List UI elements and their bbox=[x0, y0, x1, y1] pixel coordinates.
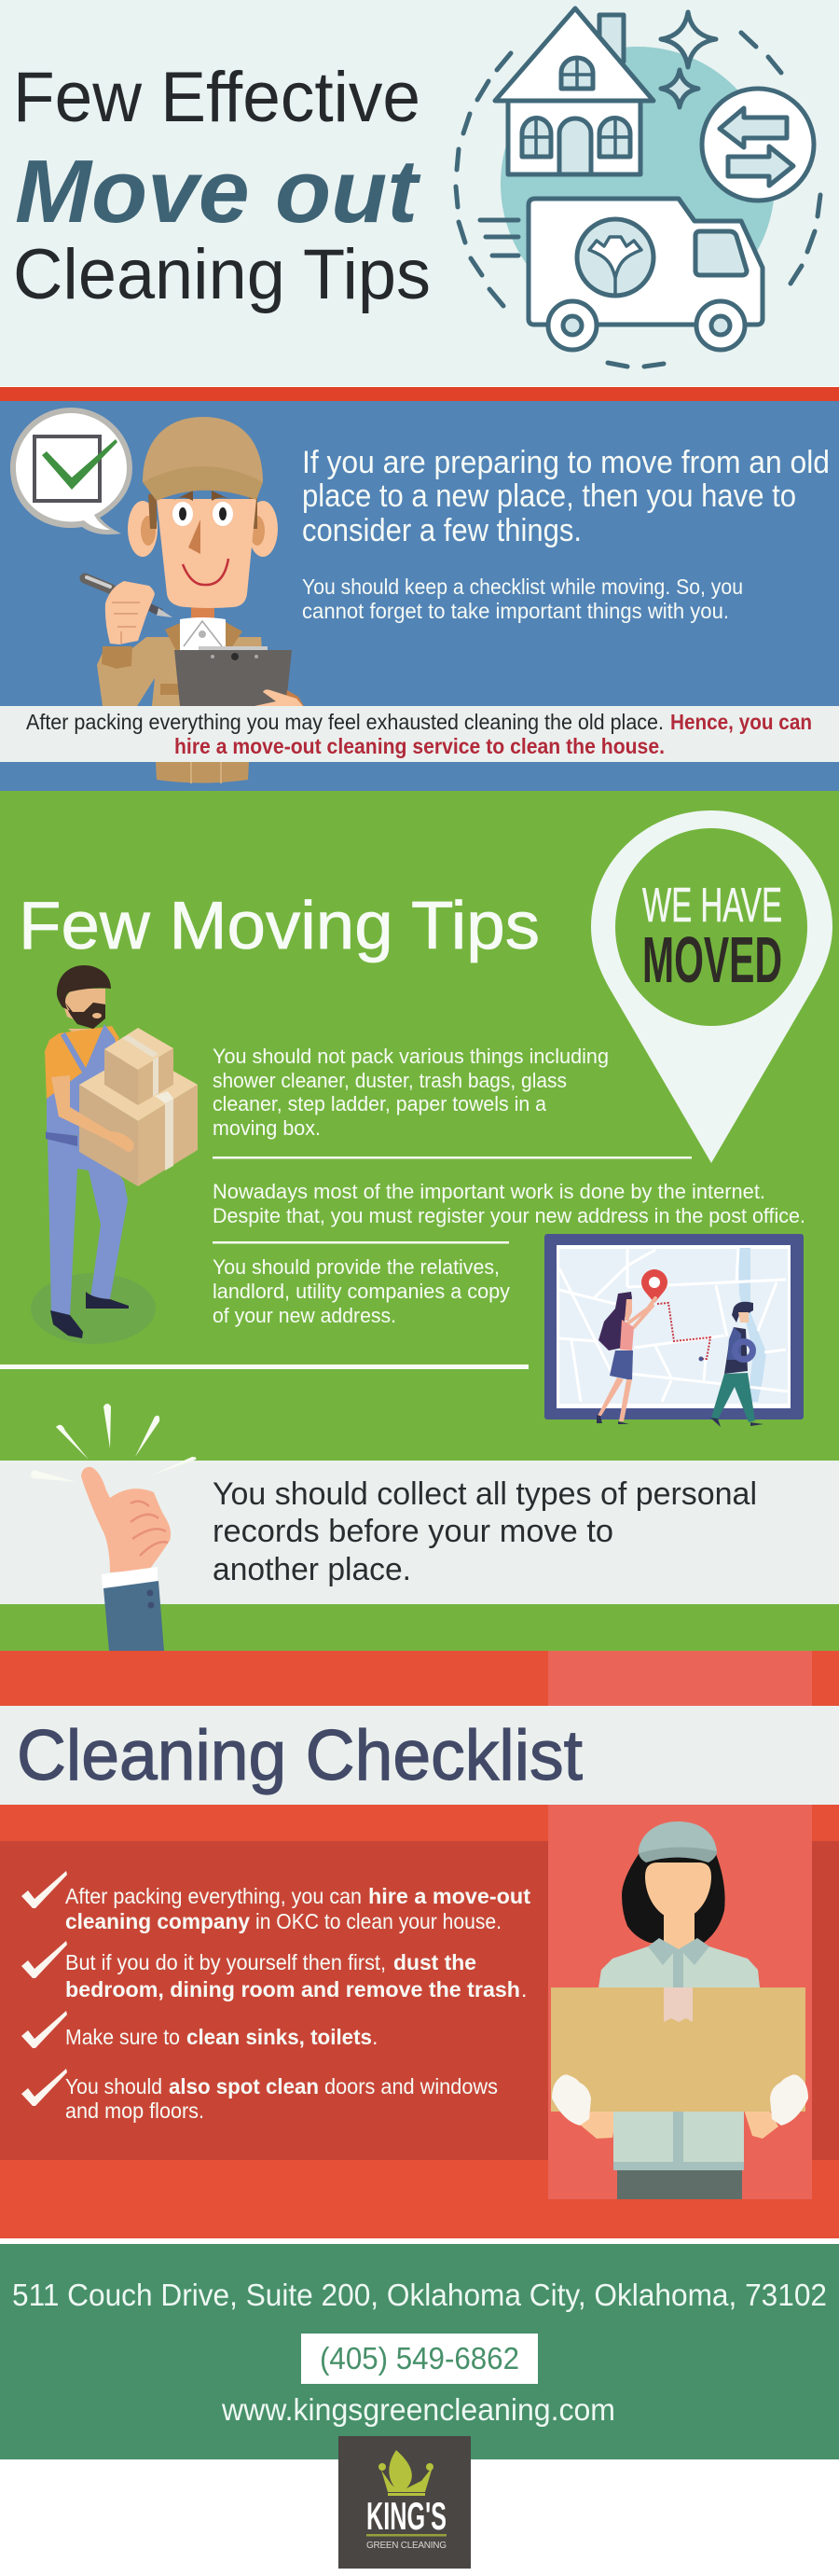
icon: we have moved map pin bbox=[591, 810, 832, 1163]
text block: register new address: Despite that, you must register your new address in the post office. bbox=[213, 1204, 805, 1227]
title: Few Effective bbox=[13, 58, 420, 137]
item 2: bedroom, dining room and remove the trash bbox=[65, 1977, 520, 2001]
item 4: doors and windows bbox=[324, 2074, 498, 2098]
illustration: woman holding a box bbox=[551, 1821, 808, 2199]
text block: what not to pack: You should not pack various things including bbox=[213, 1045, 609, 1068]
text block: intro heading: consider a few things. bbox=[302, 513, 582, 548]
red divider band bbox=[0, 387, 839, 401]
text block: provide a copy of address: landlord, utility companies a copy bbox=[213, 1280, 510, 1303]
panel: few moving tips bbox=[0, 791, 839, 1651]
item 1 bbox=[21, 1871, 530, 1933]
text block: checklist note bbox=[302, 575, 743, 623]
text block: what not to pack: shower cleaner, duster, trash bags, glass bbox=[213, 1069, 567, 1092]
address: 511 Couch Drive, Suite 200, Oklahoma City, Oklahoma, 73102 bbox=[12, 2278, 827, 2312]
panel: cleaning checklist bbox=[0, 1651, 839, 2238]
item 3: Make sure to bbox=[65, 2025, 180, 2049]
item 1: cleaning company bbox=[65, 1909, 250, 1933]
item 3 bbox=[21, 2011, 378, 2049]
logo: King's Green Cleaning bbox=[338, 2436, 471, 2569]
logo: King's Green Cleaning: KING'S bbox=[366, 2494, 447, 2538]
website: www.kingsgreencleaning.com bbox=[221, 2392, 615, 2427]
phone number bbox=[301, 2334, 538, 2384]
callout: collect personal records: records before your move to bbox=[213, 1514, 613, 1549]
item 1: After packing everything, you can bbox=[65, 1884, 362, 1908]
text block: register new address bbox=[213, 1180, 805, 1227]
item 2: dust the bbox=[393, 1950, 476, 1974]
text block: provide a copy of address bbox=[213, 1255, 510, 1327]
callout: collect personal records bbox=[0, 1461, 839, 1604]
icon: thumbs up hand bbox=[31, 1404, 196, 1651]
icon: house and moving truck illustration bbox=[456, 8, 820, 367]
item 3: clean sinks, toilets bbox=[186, 2025, 372, 2049]
text block: intro heading bbox=[302, 445, 830, 548]
text block: register new address: Nowadays most of the important work is done by the internet. bbox=[213, 1180, 765, 1203]
callout: collect personal records: You should collect all types of personal bbox=[213, 1476, 757, 1512]
text block: what not to pack bbox=[213, 1045, 609, 1140]
text block: provide a copy of address: of your new address. bbox=[213, 1304, 396, 1327]
phone number: (405) 549-6862 bbox=[320, 2341, 519, 2375]
text block: intro heading: place to a new place, then you have to bbox=[302, 478, 796, 514]
logo: King's Green Cleaning: GREEN CLEANING bbox=[366, 2541, 447, 2551]
item 2 bbox=[21, 1941, 527, 2001]
title: Move out bbox=[15, 142, 421, 242]
heading: few moving tips: Few Moving Tips bbox=[19, 889, 540, 963]
item 4: and mop floors. bbox=[65, 2098, 204, 2123]
item 4: You should bbox=[65, 2074, 162, 2098]
panel: header bbox=[0, 0, 839, 386]
item 4 bbox=[21, 2069, 498, 2123]
callout: hire a cleaning service: After packing everything you may feel exhausted cleaning the old place. bbox=[26, 710, 664, 734]
callout: collect personal records: another place. bbox=[213, 1552, 411, 1587]
callout: hire a cleaning service bbox=[0, 706, 839, 762]
item 4: also spot clean bbox=[169, 2074, 319, 2098]
title bbox=[13, 58, 431, 314]
panel: contact footer bbox=[0, 2244, 839, 2459]
heading: cleaning checklist bbox=[0, 1706, 839, 1805]
list: checklist items bbox=[21, 1871, 530, 2123]
panel: intro bbox=[0, 401, 839, 791]
item 2: . bbox=[521, 1977, 527, 2001]
text block: checklist note: You should keep a checklist while moving. So, you bbox=[302, 575, 743, 599]
callout: hire a cleaning service: hire a move-out cleaning service to clean the house. bbox=[174, 734, 665, 758]
text block: checklist note: cannot forget to take important things with you. bbox=[302, 599, 729, 623]
text block: provide a copy of address: You should provide the relatives, bbox=[213, 1255, 500, 1279]
heading: cleaning checklist: Cleaning Checklist bbox=[17, 1716, 583, 1795]
illustration: man with clipboard bbox=[85, 417, 304, 783]
text block: what not to pack: moving box. bbox=[213, 1116, 321, 1140]
title: Cleaning Tips bbox=[13, 235, 431, 314]
illustration: map with two people bbox=[544, 1234, 804, 1427]
item 1: in OKC to clean your house. bbox=[255, 1909, 502, 1933]
callout: hire a cleaning service: Hence, you can bbox=[670, 710, 812, 734]
item 1: hire a move-out bbox=[368, 1884, 530, 1908]
white separator bbox=[0, 2238, 839, 2244]
icon: checklist speech bubble bbox=[10, 408, 132, 534]
item 3: . bbox=[372, 2025, 378, 2049]
text block: what not to pack: cleaner, step ladder, paper towels in a bbox=[213, 1092, 547, 1115]
item 2: But if you do it by yourself then first, bbox=[65, 1950, 386, 1974]
illustration: man carrying boxes bbox=[31, 965, 198, 1344]
